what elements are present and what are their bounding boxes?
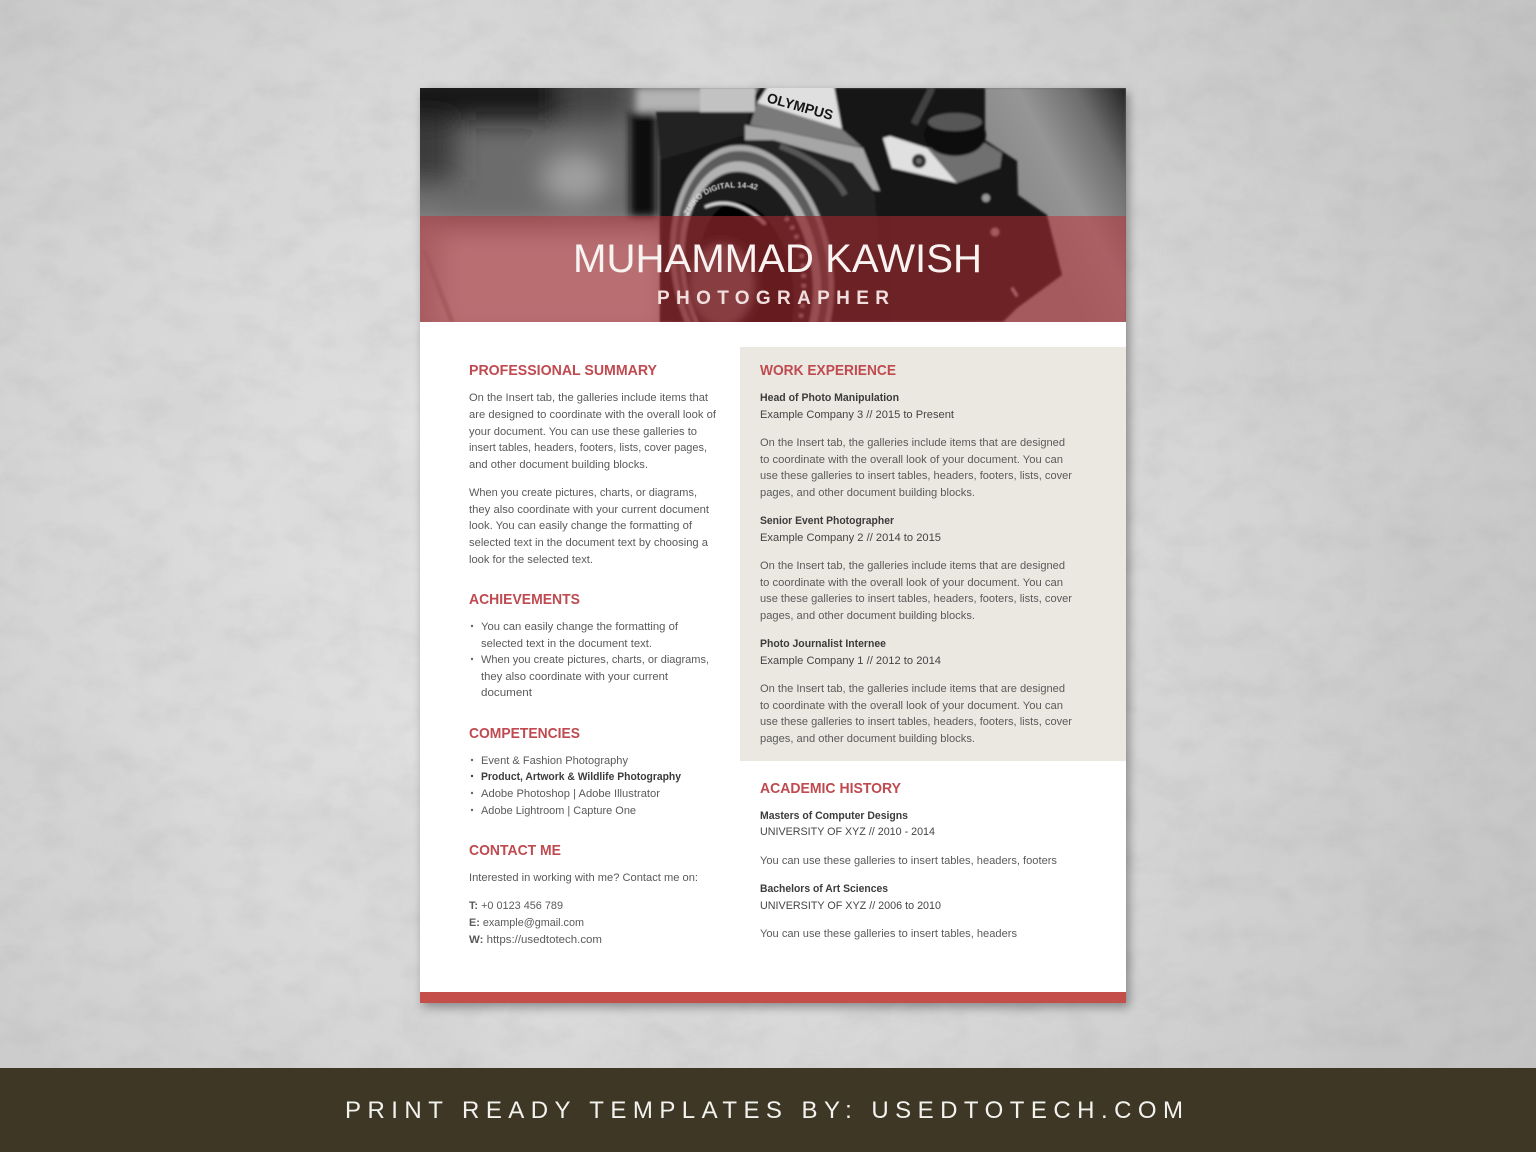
contact details: E: example@gmail.com xyxy=(469,917,584,929)
lens lettering: ZUIKO DIGITAL 14-42 xyxy=(683,181,758,216)
resume page xyxy=(417,86,1135,1013)
job 1: use these galleries to insert tables, headers, footers, lists, cover xyxy=(760,470,1072,482)
blurred right backdrop xyxy=(975,88,1126,328)
dial xyxy=(924,126,988,157)
section: professional summary xyxy=(469,362,717,566)
section: academic history xyxy=(760,780,1057,940)
section: competencies xyxy=(469,725,682,817)
job 3: Example Company 1 // 2012 to 2014 xyxy=(760,655,941,667)
achievements list xyxy=(471,621,709,699)
job 2: Senior Event Photographer xyxy=(760,515,895,527)
lens rings xyxy=(669,143,835,322)
degree 1: You can use these galleries to insert tables, headers, footers xyxy=(760,855,1057,867)
lens housing xyxy=(745,125,880,191)
diagonal streak lower left xyxy=(435,276,454,322)
achievements list: document xyxy=(481,687,532,699)
lens inner glow xyxy=(689,243,755,327)
heading: academic history: ACADEMIC HISTORY xyxy=(760,780,901,797)
achievements list: they also coordinate with your current xyxy=(481,671,668,683)
banner text: PRINT READY TEMPLATES BY: USEDTOTECH.COM xyxy=(345,1097,1183,1124)
achievements list: When you create pictures, charts, or diagrams, xyxy=(481,654,709,666)
degree 1: Masters of Computer Designs xyxy=(760,810,908,822)
heading: achievements: ACHIEVEMENTS xyxy=(469,591,580,608)
job 1: Head of Photo Manipulation xyxy=(760,392,899,404)
competencies list: Product, Artwork & Wildlife Photography xyxy=(481,771,682,783)
achievements list: You can easily change the formatting of xyxy=(481,621,679,633)
summary paragraph 2: selected text in the document text by choosing a xyxy=(469,537,709,549)
competencies list: Event & Fashion Photography xyxy=(481,755,628,767)
competencies list: Adobe Photoshop | Adobe Illustrator xyxy=(481,788,660,800)
job 3: On the Insert tab, the galleries include items that are designed xyxy=(760,683,1065,695)
degree 1: UNIVERSITY OF XYZ // 2010 - 2014 xyxy=(760,826,935,838)
heading: professional summary: PROFESSIONAL SUMMARY xyxy=(469,362,657,379)
contact details: W: https://usedtotech.com xyxy=(469,934,602,946)
contact details xyxy=(469,900,602,946)
job 2: pages, and other document building blocks. xyxy=(760,610,975,622)
summary paragraph 1: your document. You can use these galleries to xyxy=(469,426,697,438)
OLYMPUS logo: OLYMPUS xyxy=(765,89,835,123)
job 1: Example Company 3 // 2015 to Present xyxy=(760,409,954,421)
summary paragraph 1 xyxy=(469,392,717,471)
summary paragraph 2: look. You can easily change the formatting of xyxy=(469,520,693,532)
competencies list: Adobe Lightroom | Capture One xyxy=(481,805,636,817)
job 1: pages, and other document building blocks. xyxy=(760,487,975,499)
heading: competencies: COMPETENCIES xyxy=(469,725,580,742)
job 3: Photo Journalist Internee xyxy=(760,638,886,650)
job 1: to coordinate with the overall look of your document. You can xyxy=(760,454,1063,466)
bottom banner xyxy=(0,1068,1536,1152)
job 1 xyxy=(760,392,1072,499)
degree 2: UNIVERSITY OF XYZ // 2006 to 2010 xyxy=(760,900,941,912)
summary paragraph 1: are designed to coordinate with the overall look of xyxy=(469,409,717,421)
job 2: to coordinate with the overall look of your document. You can xyxy=(760,577,1063,589)
diagonal dark-gray strap on top right xyxy=(914,88,932,124)
job 3: pages, and other document building blocks. xyxy=(760,733,975,745)
achievements list: selected text in the document text. xyxy=(481,638,652,650)
red translucent band xyxy=(420,216,1126,322)
job 3: to coordinate with the overall look of your document. You can xyxy=(760,700,1063,712)
beige right panel xyxy=(740,347,1126,761)
summary paragraph 1: and other document building blocks. xyxy=(469,459,648,471)
heading: work experience: WORK EXPERIENCE xyxy=(760,362,896,379)
contact intro: Interested in working with me? Contact me on: xyxy=(469,872,698,884)
job 2 xyxy=(760,515,1072,622)
job 1: On the Insert tab, the galleries include items that are designed xyxy=(760,437,1065,449)
header photo: camera xyxy=(420,88,1126,322)
summary paragraph 2 xyxy=(469,487,709,566)
summary paragraph 1: insert tables, headers, footers, lists, cover pages, xyxy=(469,442,707,454)
job 2: Example Company 2 // 2014 to 2015 xyxy=(760,532,941,544)
summary paragraph 2: When you create pictures, charts, or diagrams, xyxy=(469,487,697,499)
competencies list xyxy=(471,755,682,817)
lens highlights xyxy=(705,203,765,224)
job subtitle: PHOTOGRAPHER xyxy=(657,288,889,309)
section: work experience xyxy=(760,362,1072,745)
degree 1 xyxy=(760,810,1057,867)
degree 2: Bachelors of Art Sciences xyxy=(760,883,888,895)
summary paragraph 1: On the Insert tab, the galleries include items that xyxy=(469,392,708,404)
job 2: use these galleries to insert tables, headers, footers, lists, cover xyxy=(760,593,1072,605)
lens dimming in band xyxy=(660,216,835,322)
left blurred dark strap xyxy=(630,88,756,216)
job 2: On the Insert tab, the galleries include items that are designed xyxy=(760,560,1065,572)
heading: contact me: CONTACT ME xyxy=(469,842,561,859)
section: contact me xyxy=(469,842,698,946)
page sheet xyxy=(420,88,1126,1003)
camera body xyxy=(654,88,1063,322)
degree 2 xyxy=(760,883,1018,940)
red footer strip xyxy=(420,992,1126,1003)
section: achievements xyxy=(469,591,709,699)
job 3 xyxy=(760,638,1072,745)
job 3: use these galleries to insert tables, headers, footers, lists, cover xyxy=(760,716,1072,728)
small lit details xyxy=(982,194,990,202)
summary paragraph 2: they also coordinate with your current document xyxy=(469,504,709,516)
contact details: T: +0 0123 456 789 xyxy=(469,900,563,912)
degree 2: You can use these galleries to insert tables, headers xyxy=(760,928,1018,940)
name title: MUHAMMAD KAWISH xyxy=(573,237,982,281)
OLYMPUS plate xyxy=(757,86,842,129)
summary paragraph 2: look for the selected text. xyxy=(469,554,593,566)
silver top plate xyxy=(883,136,960,183)
